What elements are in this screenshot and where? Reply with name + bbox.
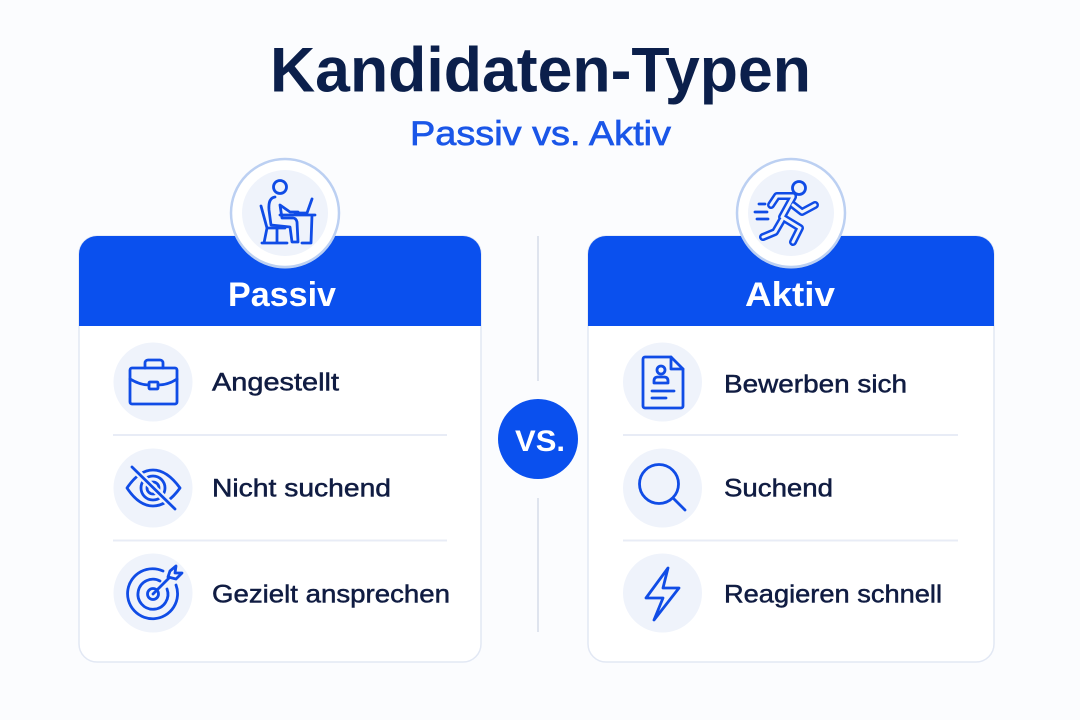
- icon: runner: [736, 159, 846, 268]
- vs badge: [498, 399, 578, 479]
- row: Gezielt ansprechen: Gezielt ansprechen: [212, 580, 450, 608]
- icon: application document: [643, 357, 683, 408]
- row: Nicht suchend: [114, 448, 391, 528]
- panel: Passiv: [79, 159, 481, 662]
- heading: Aktiv: Aktiv: [745, 276, 835, 314]
- row: Reagieren schnell: Reagieren schnell: [724, 580, 942, 608]
- icon: magnifier: [640, 464, 685, 510]
- vs badge: VS.: [515, 425, 565, 458]
- row: Angestellt: Angestellt: [212, 368, 339, 396]
- row: Angestellt: [114, 342, 339, 422]
- panel: Aktiv: [588, 159, 994, 662]
- icon: lightning bolt: [646, 568, 679, 620]
- row: Bewerben sich: [623, 342, 907, 422]
- row: Reagieren schnell: [623, 554, 942, 632]
- heading: Passiv: Passiv: [228, 276, 336, 314]
- icon: person at desk: [230, 159, 340, 268]
- icon: target: [128, 566, 182, 619]
- row: Suchend: Suchend: [724, 474, 833, 502]
- panel header: Aktiv: [588, 236, 994, 326]
- icon: crossed eye: [127, 467, 180, 509]
- subtitle: Passiv vs. Aktiv: [410, 115, 671, 153]
- center divider: [537, 236, 539, 632]
- row: Bewerben sich: Bewerben sich: [724, 370, 907, 398]
- icon: briefcase: [130, 360, 177, 404]
- row: Nicht suchend: Nicht suchend: [212, 474, 391, 502]
- row: Gezielt ansprechen: [114, 554, 450, 632]
- row: Suchend: [623, 448, 833, 528]
- title: Kandidaten-Typen: [270, 36, 811, 106]
- panel header: Passiv: [79, 236, 481, 326]
